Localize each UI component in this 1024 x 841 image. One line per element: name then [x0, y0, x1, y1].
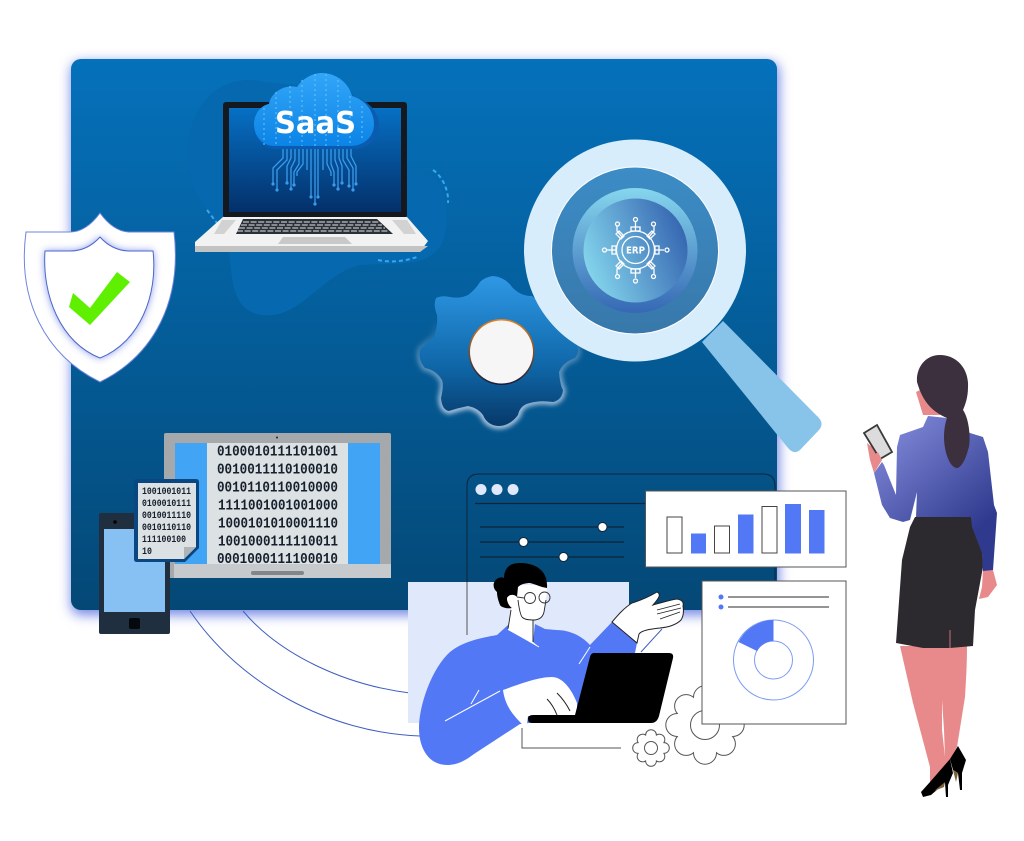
icon: binary laptop — [164, 433, 391, 578]
icon: settings gear — [420, 276, 578, 426]
gear outlines — [633, 686, 744, 766]
icon: ERP network — [602, 218, 669, 283]
connector arcs — [190, 611, 420, 736]
bar chart card — [646, 491, 846, 567]
woman with phone — [864, 355, 997, 797]
background blobs and dashes — [188, 80, 448, 315]
hair — [494, 563, 547, 608]
desk line — [522, 728, 621, 748]
binary text: 0001000111100010 — [217, 551, 338, 568]
binary text: 0010110110010000 — [217, 480, 338, 496]
icon: binary document: 0010011110 — [142, 511, 191, 522]
binary text: 1111001001001000 — [218, 498, 338, 514]
icon: binary document: 111100100 — [142, 535, 186, 546]
binary text — [217, 444, 338, 568]
icon: binary document — [134, 479, 199, 562]
binary text: 0100010111101001 — [217, 444, 338, 460]
icon: binary document: 1001001011 — [142, 487, 191, 498]
phone — [864, 425, 892, 459]
shoes — [921, 746, 966, 797]
icon: binary document: 10 — [142, 547, 152, 558]
icon: ERP network: ERP — [626, 246, 645, 256]
binary text: 0010011110100010 — [217, 462, 338, 478]
laptop — [528, 653, 673, 723]
icon: magnifying glass — [524, 140, 822, 452]
laptop base — [195, 217, 428, 252]
neck and face — [508, 585, 547, 647]
window wireframe with sliders — [467, 474, 775, 635]
ear — [507, 595, 517, 608]
skirt — [896, 517, 983, 648]
laptop screen — [223, 102, 407, 218]
donut chart card — [702, 581, 846, 724]
icon: binary document: 0010110110 — [142, 523, 191, 534]
icon: green check — [69, 272, 130, 325]
lens — [524, 140, 746, 362]
circuit lines — [271, 146, 358, 206]
forearm — [503, 677, 577, 724]
glasses — [517, 592, 550, 604]
person with laptop — [419, 563, 683, 765]
arms skin — [979, 570, 997, 599]
icon: security shield — [24, 213, 175, 382]
raised hand — [612, 592, 683, 643]
shirt — [874, 416, 997, 571]
SaaS label: SaaS — [275, 106, 356, 141]
light backdrop behind person — [408, 582, 629, 723]
handle — [702, 321, 822, 452]
torso — [419, 622, 637, 765]
binary text: 1001000111110011 — [218, 534, 338, 550]
legs — [900, 646, 967, 783]
icon: smartphone — [99, 513, 170, 634]
cloud — [254, 73, 379, 149]
neck — [916, 385, 945, 415]
hair — [917, 355, 970, 468]
panel: blue background — [71, 59, 779, 615]
binary text: 1000101010001110 — [218, 516, 338, 532]
icon: binary document: 0100010111 — [142, 499, 191, 510]
icon: SaaS laptop — [195, 73, 428, 252]
